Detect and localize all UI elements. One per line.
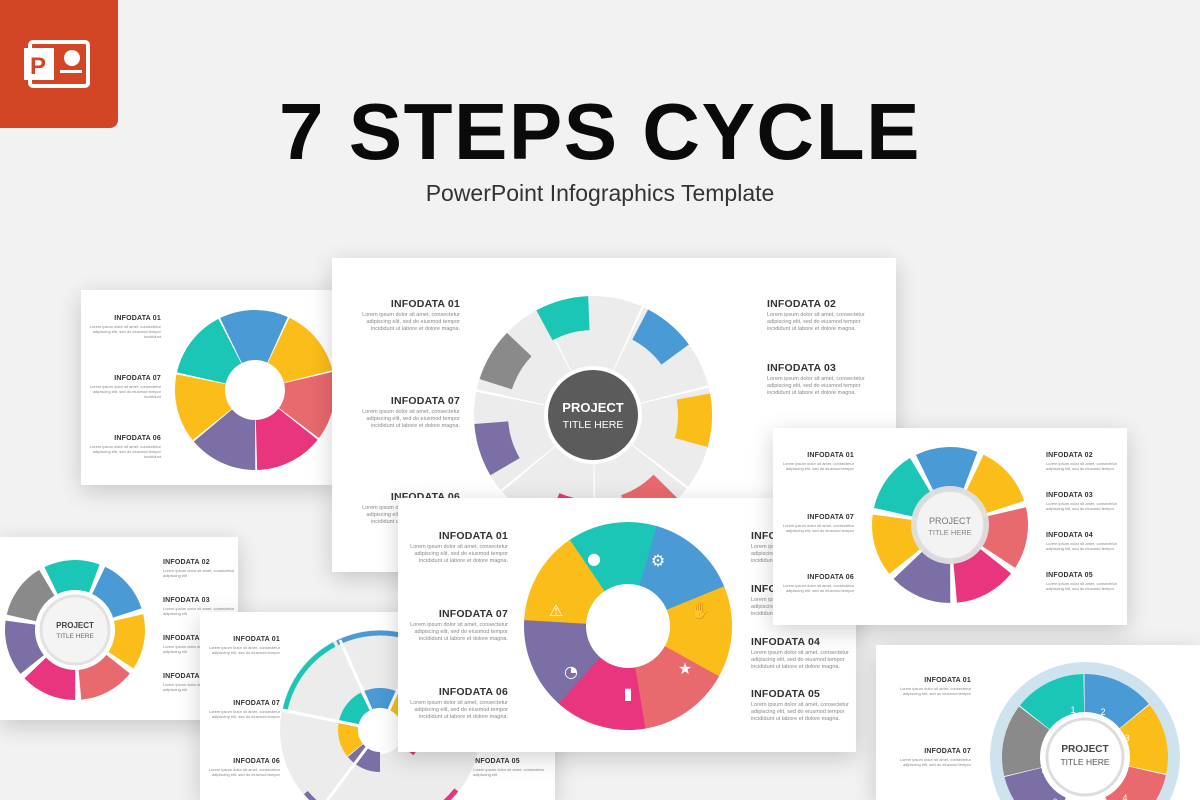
slide 4: center bottom donut: Lorem ipsum dolor sit amet, consectetur adipiscing elit, sed do eiusmod tempor incididunt ut labore et dolore magna. [410, 700, 508, 720]
slide 6: bottom mid-left: Lorem ipsum dolor sit amet, consectetur adipiscing elit, sed do eiusmod tempor [209, 767, 280, 777]
slide 3: right: INFODATA 02 [1046, 452, 1093, 459]
slide 3: right: INFODATA 05 [1046, 572, 1093, 579]
numbered ring [990, 662, 1180, 800]
slide 3: right: Lorem ipsum dolor sit amet, consectetur adipiscing elit, sed do eiusmod tempor [783, 523, 854, 533]
numbered ring: 1 [1070, 705, 1076, 715]
slide 2: center top: Lorem ipsum dolor sit amet, consectetur adipiscing elit, sed do eiusmod tempor incididunt ut labore et dolore magna. [362, 505, 460, 525]
slide 5: left bottom: Lorem ipsum dolor sit amet, consectetur adipiscing elit [163, 606, 234, 616]
slide 6: bottom mid-left: INFODATA 01 [233, 636, 280, 643]
slide 2: center top: INFODATA 01 [391, 298, 460, 310]
slide 6: bottom mid-left: INFODATA 06 [233, 758, 280, 765]
slide 6: bottom mid-left: Lorem ipsum dolor sit amet, consectetur adipiscing elit, sed do eiusmod tempor [209, 645, 280, 655]
slide 3: right: INFODATA 04 [1046, 532, 1093, 539]
ring chart [280, 630, 478, 800]
slide 4: center bottom donut: Lorem ipsum dolor sit amet, consectetur adipiscing elit, sed do eiusmod tempor incididunt ut labore et dolore magna. [410, 622, 508, 642]
slide 2: center top [332, 258, 896, 572]
slide 5: left bottom: Lorem ipsum dolor sit amet, consectetur adipiscing elit [163, 568, 234, 578]
slide 3: right: INFODATA 07 [807, 514, 854, 521]
segmented wheel: TITLE HERE [563, 419, 623, 431]
slide 3: right: Lorem ipsum dolor sit amet, consectetur adipiscing elit, sed do eiusmod tempor [1046, 581, 1117, 591]
slide 6: bottom mid-left: Lorem ipsum dolor sit amet, consectetur adipiscing elit, sed do eiusmod tempor [209, 709, 280, 719]
slide 3: right [773, 428, 1127, 625]
slide 4: center bottom donut: INFODATA 05 [751, 688, 820, 700]
petal cycle: TITLE HERE [928, 528, 972, 537]
slide 3: right: INFODATA 03 [1046, 492, 1093, 499]
donut chart: ★ [678, 659, 692, 678]
petal cycle [872, 447, 1028, 603]
title: 7 STEPS CYCLE [279, 87, 921, 176]
slide 7: bottom right [876, 645, 1200, 800]
slide 1: left top: Lorem ipsum dolor sit amet, consectetur adipiscing elit, sed do eiusmod tempor incididunt [90, 444, 161, 459]
numbered ring: 2 [1100, 707, 1106, 717]
segmented wheel: PROJECT [562, 400, 624, 415]
slide 7: bottom right: Lorem ipsum dolor sit amet, consectetur adipiscing elit, sed do eiusmod tempor [900, 757, 971, 767]
slide 4: center bottom donut: Lorem ipsum dolor sit amet, consectetur adipiscing elit, sed do eiusmod tempor incididunt ut labore et dolore magna. [751, 597, 849, 617]
slide 5: left bottom: INFODATA 02 [163, 559, 210, 566]
slide 3: right: Lorem ipsum dolor sit amet, consectetur adipiscing elit, sed do eiusmod tempor [1046, 541, 1117, 551]
numbered ring: PROJECT [1061, 744, 1109, 755]
slide 2: center top: INFODATA 02 [767, 298, 836, 310]
donut chart: ⚠ [549, 601, 563, 620]
slide 2: center top: Lorem ipsum dolor sit amet, consectetur adipiscing elit, sed do eiusmod tempor incididunt ut labore et dolore magna. [362, 312, 460, 332]
slide 6: bottom mid-left: Lorem ipsum dolor sit amet, consectetur adipiscing elit [473, 767, 544, 777]
donut chart: ▮ [624, 684, 632, 703]
slide 2: center top: INFODATA 03 [767, 362, 836, 374]
slide 5: left bottom: INFODATA 05 [163, 673, 210, 680]
slide 5: left bottom [0, 537, 238, 720]
powerpoint logo [0, 0, 118, 128]
slide 3: right: Lorem ipsum dolor sit amet, consectetur adipiscing elit, sed do eiusmod tempor [1046, 501, 1117, 511]
slide 1: left top: Lorem ipsum dolor sit amet, consectetur adipiscing elit, sed do eiusmod tempor incididunt [90, 324, 161, 339]
slide 4: center bottom donut: INFODATA 03 [751, 583, 820, 595]
slide 4: center bottom donut: INFODATA 06 [439, 686, 508, 698]
donut chart: ◔ [564, 662, 578, 681]
slide 7: bottom right: Lorem ipsum dolor sit amet, consectetur adipiscing elit, sed do eiusmod tempor [900, 686, 971, 696]
cycle chart [175, 310, 332, 470]
numbered ring: TITLE HERE [1060, 757, 1110, 767]
slide 4: center bottom donut: INFODATA 02 [751, 530, 820, 542]
slide 5: left bottom: INFODATA 04 [163, 635, 210, 642]
segmented wheel [474, 296, 712, 498]
donut chart: ✋ [690, 601, 710, 620]
arrow cycle: TITLE HERE [56, 633, 94, 640]
slide 1: left top [81, 290, 335, 485]
donut chart: ⚙ [651, 551, 665, 570]
slide 5: left bottom: Lorem ipsum dolor sit amet, consectetur adipiscing elit [163, 682, 234, 692]
slide 7: bottom right: INFODATA 07 [924, 748, 971, 755]
numbered ring: 7 [1040, 765, 1046, 775]
arrow cycle [5, 560, 145, 700]
slide 4: center bottom donut: INFODATA 04 [751, 636, 820, 648]
slide 5: left bottom: Lorem ipsum dolor sit amet, consectetur adipiscing elit [163, 644, 234, 654]
slide 4: center bottom donut: Lorem ipsum dolor sit amet, consectetur adipiscing elit, sed do eiusmod tempor incididunt ut labore et dolore magna. [751, 702, 849, 722]
slide 6: bottom mid-left: INFODATA 05 [473, 758, 520, 765]
slide 1: left top: Lorem ipsum dolor sit amet, consectetur adipiscing elit, sed do eiusmod tempor incididunt [90, 384, 161, 399]
slide 4: center bottom donut: Lorem ipsum dolor sit amet, consectetur adipiscing elit, sed do eiusmod tempor incididunt ut labore et dolore magna. [751, 650, 849, 670]
powerpoint logo: P [30, 53, 46, 80]
arrow cycle: PROJECT [56, 621, 94, 630]
slide 6: bottom mid-left: INFODATA 07 [233, 700, 280, 707]
slide 7: bottom right: INFODATA 01 [924, 677, 971, 684]
slide 4: center bottom donut: Lorem ipsum dolor sit amet, consectetur adipiscing elit, sed do eiusmod tempor incididunt ut labore et dolore magna. [410, 544, 508, 564]
slide 2: center top: Lorem ipsum dolor sit amet, consectetur adipiscing elit, sed do eiusmod tempor incididunt ut labore et dolore magna. [767, 376, 865, 396]
subtitle: PowerPoint Infographics Template [426, 180, 774, 206]
slide 3: right: INFODATA 01 [807, 452, 854, 459]
slide 2: center top: Lorem ipsum dolor sit amet, consectetur adipiscing elit, sed do eiusmod tempor incididunt ut labore et dolore magna. [362, 409, 460, 429]
slide 3: right: INFODATA 06 [807, 574, 854, 581]
slide 3: right: Lorem ipsum dolor sit amet, consectetur adipiscing elit, sed do eiusmod tempor [1046, 461, 1117, 471]
donut chart: ● [587, 549, 601, 568]
petal cycle: PROJECT [929, 516, 971, 526]
slide 4: center bottom donut [398, 498, 856, 752]
slide 2: center top: INFODATA 07 [391, 395, 460, 407]
slide 4: center bottom donut: Lorem ipsum dolor sit amet, consectetur adipiscing elit, sed do eiusmod tempor incididunt ut labore et dolore magna. [751, 544, 849, 564]
slide 2: center top: INFODATA 06 [391, 491, 460, 503]
slide 1: left top: INFODATA 07 [114, 375, 161, 382]
slide 2: center top: Lorem ipsum dolor sit amet, consectetur adipiscing elit, sed do eiusmod tempor incididunt ut labore et dolore magna. [767, 312, 865, 332]
slide 6: bottom mid-left [200, 612, 555, 800]
slide 4: center bottom donut: INFODATA 07 [439, 608, 508, 620]
donut chart [524, 522, 732, 730]
numbered ring: 3 [1124, 733, 1130, 743]
slide 3: right: Lorem ipsum dolor sit amet, consectetur adipiscing elit, sed do eiusmod tempor [783, 461, 854, 471]
slide 3: right: Lorem ipsum dolor sit amet, consectetur adipiscing elit, sed do eiusmod tempor [783, 583, 854, 593]
slide 5: left bottom: INFODATA 03 [163, 597, 210, 604]
slide 1: left top: INFODATA 01 [114, 315, 161, 322]
slide 1: left top: INFODATA 06 [114, 435, 161, 442]
slide 4: center bottom donut: INFODATA 01 [439, 530, 508, 542]
